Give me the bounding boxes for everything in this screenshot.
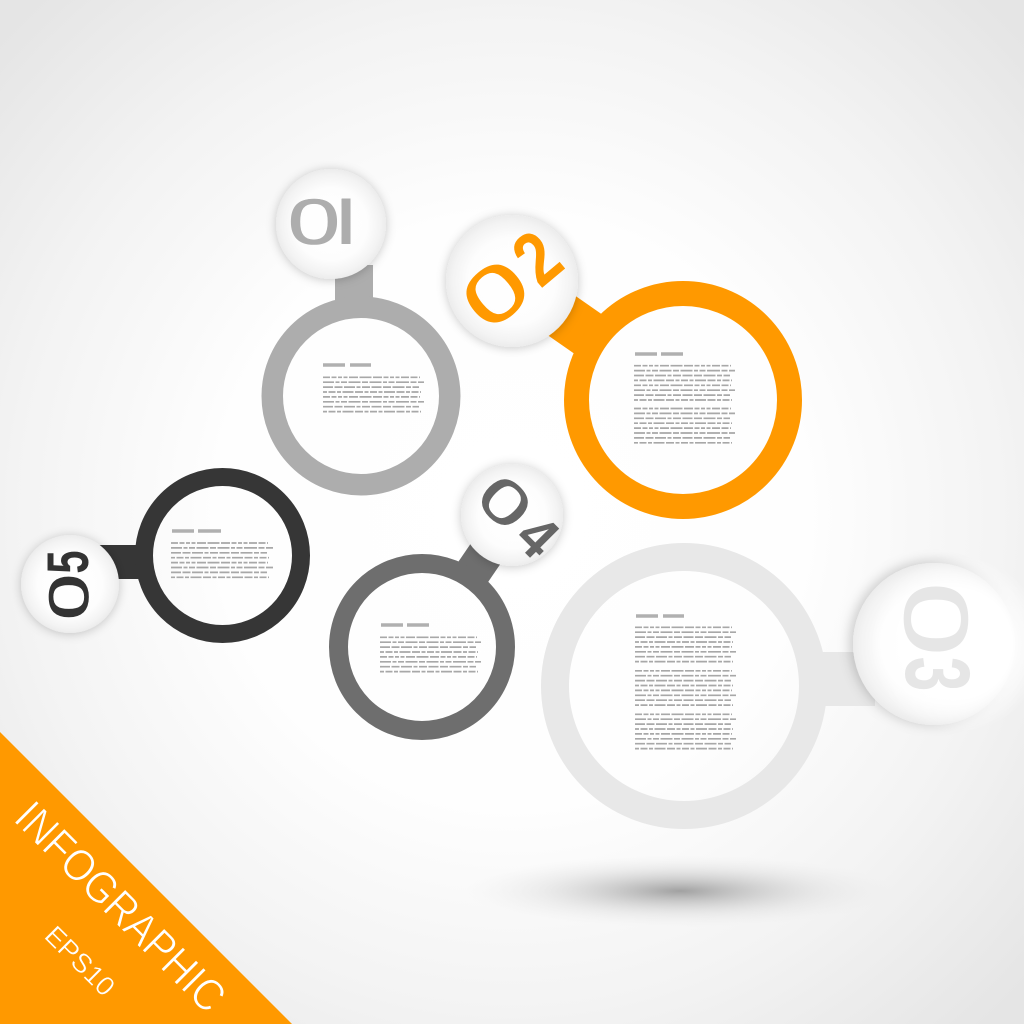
step 05 ring <box>90 477 301 634</box>
number badge 02 <box>445 214 578 347</box>
number badge 05 <box>21 535 119 633</box>
number badge 05: 0 <box>37 574 100 620</box>
number badge 02: 0 <box>445 241 547 347</box>
text block 01 <box>323 365 424 412</box>
floor shadow <box>465 855 895 927</box>
text block 03 <box>635 616 736 749</box>
banner subtitle: EPS10 <box>39 920 121 1002</box>
number badge 04: 0 <box>463 461 546 544</box>
number badge 04 <box>461 461 572 571</box>
corner banner <box>0 732 292 1024</box>
number badge 01: 1 <box>326 184 363 258</box>
number badge 03: 0 <box>885 582 986 656</box>
text block 05 <box>171 531 273 577</box>
step 02 ring <box>512 281 790 506</box>
number badge 03 <box>853 556 1024 732</box>
step 03 ring <box>555 557 875 815</box>
number badge 01: 0 <box>288 187 340 258</box>
text block 04 <box>380 625 481 672</box>
text block 02 <box>634 354 735 443</box>
number badge 03: 3 <box>886 657 989 691</box>
number badge 01 <box>276 169 386 279</box>
number badge 05: 5 <box>35 550 101 574</box>
number badge 02: 2 <box>496 214 578 302</box>
step 01 ring <box>272 265 450 485</box>
number badge 04: 4 <box>503 502 572 571</box>
step 04 ring <box>338 515 512 730</box>
